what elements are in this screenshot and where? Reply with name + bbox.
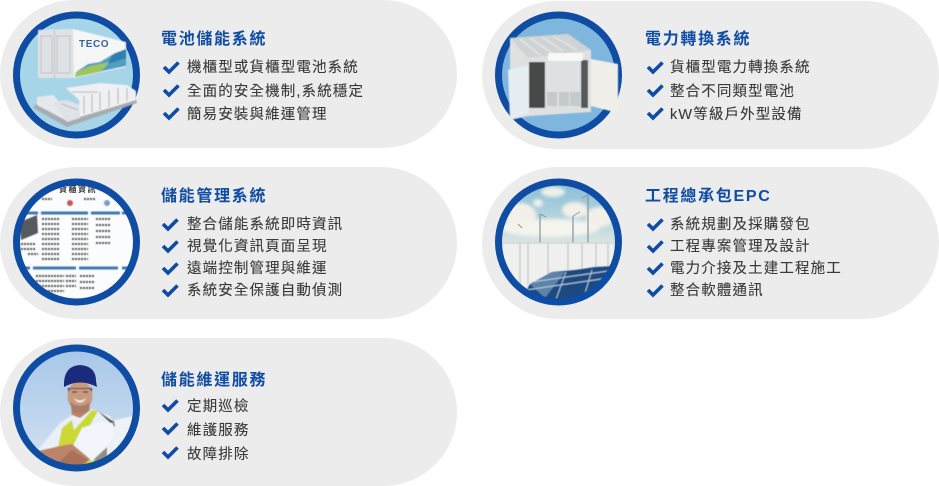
checklist <box>163 216 343 299</box>
checklist: 視覺化資訊頁面呈現 <box>187 238 328 255</box>
hard hat <box>64 365 97 387</box>
icon: management dashboard screenshot <box>10 182 140 302</box>
heading: 儲能維運服務 <box>161 371 267 389</box>
panel: energy management system <box>0 167 457 319</box>
icon: solar and storage site photo <box>495 182 620 305</box>
panel: power conversion system <box>482 1 939 149</box>
checklist: 電力介接及土建工程施工 <box>670 260 842 277</box>
panel: battery storage system <box>0 0 457 148</box>
checklist: 整合不同類型電池 <box>670 83 795 100</box>
logo text: TECO <box>79 39 109 50</box>
heading: 儲能管理系統 <box>161 186 267 205</box>
checklist: kW等級戶外型設備 <box>670 105 803 123</box>
icon: management dashboard screenshot: 貨櫃資訊 <box>59 184 97 194</box>
checklist: 工程專案管理及設計 <box>670 237 811 255</box>
panel: storage O&M service <box>0 338 457 486</box>
checklist: 貨櫃型電力轉換系統 <box>670 58 811 76</box>
checklist: 整合儲能系統即時資訊 <box>187 216 343 233</box>
checklist: 系統規劃及採購發包 <box>670 216 811 233</box>
checklist: 簡易安裝與維運管理 <box>187 105 328 123</box>
checklist <box>163 398 250 463</box>
checklist: 遠端控制管理與維運 <box>187 259 328 277</box>
icon: battery container photo <box>16 15 137 135</box>
checklist: 全面的安全機制,系統穩定 <box>187 83 364 100</box>
icon: power conversion cabinet photo <box>498 15 618 135</box>
panel: EPC engineering <box>482 167 939 319</box>
heading: 電池儲能系統 <box>161 29 267 48</box>
checklist: 系統安全保護自動偵測 <box>187 282 343 299</box>
checklist: 整合軟體通訊 <box>670 282 764 299</box>
checklist <box>164 58 364 123</box>
checklist: 維護服務 <box>187 422 250 439</box>
checklist: 故障排除 <box>187 445 250 463</box>
checklist: 定期巡檢 <box>187 398 250 415</box>
icon: engineer portrait photo <box>16 348 136 470</box>
checklist <box>648 216 842 299</box>
checklist: 機櫃型或貨櫃型電池系統 <box>187 58 359 76</box>
checklist <box>648 58 811 123</box>
heading: 電力轉換系統 <box>645 29 751 48</box>
heading: 工程總承包EPC <box>645 186 772 205</box>
